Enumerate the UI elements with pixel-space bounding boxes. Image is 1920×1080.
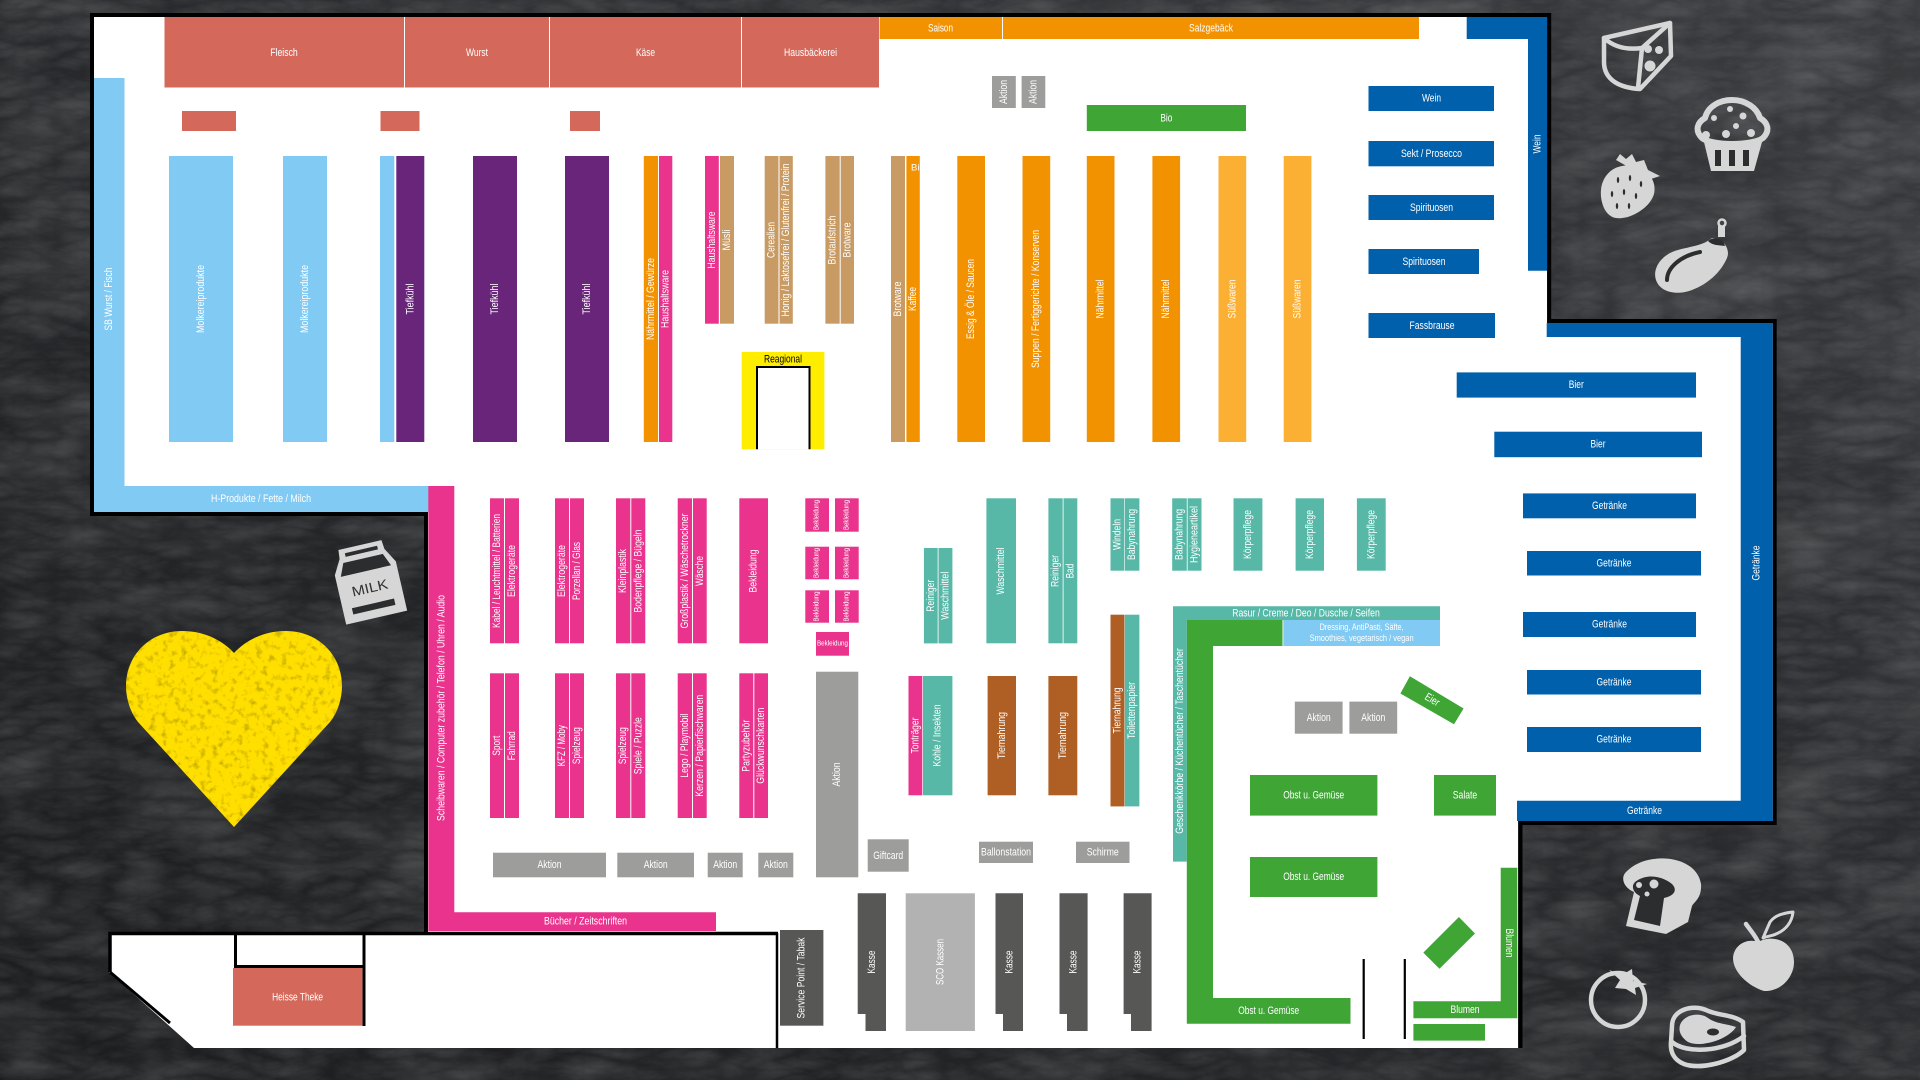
wall shelf: SB Wurst / H-Produkte — [94, 78, 428, 512]
rack: Bekleidung 4: Bekleidung — [843, 548, 850, 578]
aisle: Süßwaren 1: Süßwaren — [1226, 280, 1238, 318]
promo: Ballonstation: Ballonstation — [981, 846, 1031, 858]
wall shelf: SB Wurst / H-Produkte: SB Wurst / Fisch — [103, 268, 115, 330]
promo: Giftcard — [868, 839, 909, 872]
wall shelf: Blumen — [1413, 868, 1517, 1018]
drinks: Getränke 3: Getränke — [1592, 618, 1627, 630]
checkout: SCO Kassen: SCO Kassen — [934, 939, 946, 985]
drinks: Fassbrause: Fassbrause — [1410, 320, 1454, 332]
aisle: Nährmittel 2 — [1152, 156, 1180, 442]
rack: Bekleidung 6: Bekleidung — [843, 591, 850, 622]
aisle: light blue sliver — [380, 156, 394, 442]
display: Obst u. Gemüse 1 — [1250, 775, 1377, 816]
shelf: Bekleidung: Bekleidung — [748, 550, 760, 592]
promo: Ballonstation — [979, 842, 1033, 863]
drinks: Sekt / Prosecco — [1368, 141, 1494, 166]
shelf: Bio: Bio — [1160, 112, 1172, 124]
promo: Schirme: Schirme — [1087, 846, 1119, 858]
shelf: green block below Blumen — [1413, 1024, 1485, 1041]
drinks: Bier 1: Bier — [1569, 379, 1584, 391]
aisle: Molkereiprodukte 1: Molkereiprodukte — [195, 265, 207, 333]
shelf: Reiniger — [924, 548, 938, 643]
shelf: Körperpflege 3 — [1357, 498, 1386, 571]
promo: Aktion tall — [816, 672, 858, 877]
shelf: Honig / Laktosefrei: Honig / Laktosefrei / Glutenfrei / Protein — [780, 164, 792, 316]
shelf: Toilettenpapier — [1125, 615, 1139, 806]
checkout: Kasse 2: Kasse — [1003, 950, 1015, 974]
drinks: Spirituosen 2 — [1368, 249, 1479, 274]
display: Salate: Salate — [1453, 790, 1477, 802]
shelf: Haushaltsware — [705, 156, 719, 324]
shelf: Dressing — [1283, 620, 1440, 646]
promo: Aktion row 2: Aktion — [644, 859, 668, 871]
wall shelf: Wein — [1467, 17, 1547, 271]
shelf: Spielzeug 1 — [570, 673, 584, 818]
promo: Giftcard: Giftcard — [873, 850, 903, 862]
wall shelf: Blumen: Blumen — [1503, 928, 1515, 958]
shelf: Elektrogeräte 2 — [555, 498, 569, 643]
wall shelf: Obst u. Gemüse: Obst u. Gemüse — [1238, 1005, 1299, 1017]
shelf: Körperpflege 1: Körperpflege — [1242, 510, 1254, 559]
Regional display — [742, 352, 824, 449]
wall shelf: Getränke — [1517, 323, 1773, 821]
shelf: Spielzeug 2 — [616, 673, 630, 818]
shelf: Sport: Sport — [491, 736, 503, 756]
shelf: Wäsche — [693, 498, 707, 643]
shelf: Spielzeug 1: Spielzeug — [571, 727, 583, 764]
promo: Aktion produce 2 — [1349, 702, 1397, 734]
shelf: Porzellan / Glas: Porzellan / Glas — [571, 542, 583, 600]
counter: Service Point / Tabak: Service Point / Tabak — [796, 937, 808, 1018]
strip: Salzgebäck: Salzgebäck — [1189, 22, 1233, 34]
shelf: Wäsche: Wäsche — [694, 556, 706, 586]
shelf: Reiniger 2 — [1048, 498, 1063, 643]
shelf: Haushaltsware: Haushaltsware — [706, 212, 718, 268]
small counter 2 — [380, 111, 420, 131]
aisle: Suppen — [1022, 156, 1050, 442]
shelf: Kabel / Leuchtmittel — [490, 498, 504, 643]
shelf: Körperpflege 3: Körperpflege — [1365, 510, 1377, 559]
drinks: Wein: Wein — [1422, 92, 1441, 104]
drinks: Getränke 3 — [1523, 612, 1696, 637]
shelf: Reiniger 2: Reiniger — [1050, 555, 1062, 587]
shelf: Elektrogeräte 1: Elektrogeräte — [506, 545, 518, 597]
strip: Saison: Saison — [928, 22, 953, 34]
wall shelf: Rasur and Geschenkkörbe: Rasur / Creme / Deo / Dusche / Seifen — [1232, 608, 1380, 620]
drinks: Getränke 5: Getränke — [1596, 734, 1632, 746]
drinks: Bier 2: Bier — [1590, 438, 1606, 450]
rack: Bekleidung 1: Bekleidung — [814, 500, 821, 530]
counter: Hausbäckerei: Hausbäckerei — [784, 47, 837, 59]
checkout: Kasse 3: Kasse — [1068, 950, 1080, 974]
shelf: Brotaufstrich: Brotaufstrich — [827, 216, 839, 264]
shelf: Sport — [490, 673, 504, 818]
rack: Bekleidung 7 — [816, 632, 849, 656]
wall shelf: Rasur and Geschenkkörbe — [1173, 606, 1440, 862]
aisle: Kaffee: Bio — [911, 162, 925, 174]
aisle: Tiefkühl 3 — [565, 156, 609, 442]
display: Obst u. Gemüse 2 — [1250, 857, 1377, 897]
checkout: Kasse 1 — [858, 893, 886, 1031]
aisle: Tiefkühl 1: Tiefkühl — [404, 284, 416, 314]
shelf: Großplastik — [678, 498, 692, 643]
display: Obst u. Gemüse 1: Obst u. Gemüse — [1283, 790, 1344, 802]
shelf: Cerealien: Cerealien — [766, 222, 778, 258]
shelf: Elektrogeräte 2: Elektrogeräte — [556, 545, 568, 597]
aisle: Molkereiprodukte 2: Molkereiprodukte — [299, 265, 311, 333]
aisle: Essig & Öle: Essig & Öle / Saucen — [965, 259, 977, 339]
shelf: Tiernahrung 2 — [1048, 676, 1077, 795]
shelf: Kerzen: Kerzen / Papierfischwaren — [694, 695, 706, 797]
shelf: Glückwunschkarten — [754, 673, 768, 818]
shelf: Babynahrung 2: Babynahrung — [1174, 509, 1186, 560]
shelf: Kohle / Insekten — [923, 676, 952, 795]
promo: Aktion 1 — [992, 76, 1016, 108]
shelf: Waschmittel — [986, 498, 1016, 643]
drinks: Getränke 1: Getränke — [1592, 500, 1627, 512]
display: angled green table — [1423, 917, 1475, 969]
rack: Bekleidung 7: Bekleidung — [817, 640, 848, 648]
shelf: KFZ / Moby: KFZ / Moby — [556, 725, 568, 766]
aisle: Haushaltsware — [659, 156, 672, 442]
wall shelf: Blumen: Blumen — [1450, 1004, 1480, 1016]
shelf: Babynahrung 1 — [1125, 498, 1139, 571]
icon: strawberry — [1601, 154, 1660, 218]
shelf: Müsli: Müsli — [721, 230, 733, 250]
shelf: Windeln — [1110, 498, 1124, 571]
promo: Aktion row 1 — [493, 853, 606, 877]
shelf: Müsli — [720, 156, 734, 324]
wall shelf: Schreibwaren and Bücher: Bücher / Zeitschriften — [544, 916, 627, 928]
shelf: Kohle / Insekten: Kohle / Insekten — [932, 704, 944, 766]
shelf: Kleinplastik — [616, 498, 630, 643]
shelf: Fahrrad: Fahrrad — [506, 731, 518, 760]
wall shelf: Obst u. Gemüse — [1187, 620, 1350, 1024]
shelf: Fahrrad — [505, 673, 519, 818]
icon: milk carton — [329, 538, 407, 625]
shelf: Partyzubehör — [739, 673, 753, 818]
counter: Fleisch: Fleisch — [270, 47, 298, 59]
aisle: Brotware: Brotware — [892, 282, 904, 316]
promo: Aktion produce 1 — [1295, 702, 1343, 734]
promo: Aktion row 1: Aktion — [538, 859, 562, 871]
rack: Bekleidung 4 — [835, 547, 859, 579]
Regional display: Reagional — [764, 354, 802, 366]
rack: Bekleidung 6 — [835, 590, 859, 623]
checkout: Kasse 1: Kasse — [866, 950, 878, 974]
shelf: Bad: Bad — [1064, 564, 1076, 578]
shelf: Waschmittel: Waschmittel — [995, 548, 1007, 594]
icon: cheese — [1604, 23, 1671, 89]
drinks: Spirituosen 1: Spirituosen — [1410, 202, 1453, 214]
shelf: Bodenpflege / Bügeln — [631, 498, 645, 643]
wall shelf: Rasur and Geschenkkörbe: Geschenkkörbe / Küchentücher / Taschentücher — [1174, 648, 1186, 834]
shelf: Tiernahrung 3: Tiernahrung — [1112, 688, 1124, 734]
shelf: Hygieneartikel: Hygieneartikel — [1188, 506, 1200, 563]
shelf: Spielzeug 2: Spielzeug — [617, 727, 629, 764]
entrance gate lines — [1363, 959, 1406, 1039]
drinks: Getränke 2 — [1527, 551, 1701, 576]
aisle: Nährmittel / Gewürze: Nährmittel / Gewürze — [645, 258, 657, 340]
shelf: Toilettenpapier: Toilettenpapier — [1126, 682, 1138, 739]
shelf: Tiernahrung 3 — [1110, 615, 1124, 806]
display: Eier — [1400, 676, 1464, 724]
strip: Salzgebäck — [1003, 17, 1419, 39]
drinks: Getränke 4: Getränke — [1596, 676, 1632, 688]
aisle: Haushaltsware: Haushaltsware — [660, 270, 672, 328]
drinks: Spirituosen 2: Spirituosen — [1402, 256, 1446, 268]
aisle: Kaffee — [906, 156, 920, 442]
drinks: Bier 2 — [1494, 432, 1702, 457]
counter: Heisse Theke: Heisse Theke — [272, 992, 323, 1004]
shelf: Brotaufstrich — [825, 156, 840, 324]
shelf: Lego / Playmobil — [678, 673, 692, 818]
promo: Aktion produce 2: Aktion — [1361, 712, 1385, 724]
aisle: Nährmittel / Gewürze — [644, 156, 658, 442]
aisle: Süßwaren 1 — [1218, 156, 1246, 442]
promo: Aktion 1: Aktion — [998, 80, 1010, 104]
shelf: Spiele / Puzzle: Spiele / Puzzle — [632, 717, 644, 774]
shelf: Tiernahrung 1 — [988, 676, 1016, 795]
drinks: Fassbrause — [1368, 313, 1495, 338]
promo: Aktion row 2 — [617, 853, 694, 877]
display: Salate — [1434, 775, 1496, 816]
checkout: SCO Kassen — [906, 893, 975, 1031]
wall shelf: Schreibwaren and Bücher — [428, 486, 716, 931]
shelf: Waschmittel small — [938, 548, 952, 643]
shelf: Großplastik: Großplastik / Wäschetrockner — [679, 513, 691, 629]
shelf: Porzellan / Glas — [570, 498, 584, 643]
promo: Aktion row 3: Aktion — [713, 859, 737, 871]
aisle: Kaffee: Kaffee — [907, 287, 919, 311]
aisle: Tiefkühl 1 — [396, 156, 424, 442]
aisle: Suppen: Suppen / Fertiggerichte / Konserven — [1030, 230, 1042, 368]
shelf: Glückwunschkarten: Glückwunschkarten — [755, 708, 767, 784]
promo: Aktion produce 1: Aktion — [1307, 712, 1331, 724]
aisle: Brotware — [891, 156, 905, 442]
rack: Bekleidung 5: Bekleidung — [814, 591, 821, 622]
rack: Bekleidung 5 — [805, 590, 829, 623]
shelf: Cerealien — [765, 156, 778, 324]
aisle: Nährmittel 1 — [1087, 156, 1114, 442]
shelf: Bodenpflege / Bügeln: Bodenpflege / Bügeln — [632, 530, 644, 612]
icon: apple — [1733, 912, 1794, 991]
rack: Bekleidung 3: Bekleidung — [814, 548, 821, 578]
promo: Aktion row 4 — [758, 853, 793, 877]
counter: Fleisch — [164, 17, 404, 88]
icon: milk carton: MILK — [350, 576, 390, 600]
shelf: Bio — [1087, 105, 1246, 131]
shelf: Dressing: Dressing, AntiPasti, Säfte, — [1320, 622, 1404, 633]
shelf: Waschmittel small: Waschmittel — [940, 572, 952, 620]
counter: Käse — [550, 17, 741, 88]
shelf: Reiniger: Reiniger — [925, 579, 937, 612]
shelf: Elektrogeräte 1 — [505, 498, 519, 643]
checkout: Kasse 4 — [1124, 893, 1152, 1031]
shelf: Körperpflege 1 — [1234, 498, 1262, 571]
rack: Bekleidung 1 — [805, 498, 829, 532]
yellow heart — [126, 631, 342, 827]
wall shelf: Getränke: Getränke — [1627, 805, 1662, 817]
shelf: Bad — [1064, 498, 1077, 643]
shelf: Kleinplastik: Kleinplastik — [617, 549, 629, 593]
small counter 1 — [182, 111, 236, 131]
shelf: Tiernahrung 1: Tiernahrung — [996, 712, 1008, 759]
aisle: Nährmittel 2: Nährmittel — [1160, 280, 1172, 318]
shelf: Kabel / Leuchtmittel: Kabel / Leuchtmittel / Batterien — [491, 514, 503, 628]
shelf: Brotware — [841, 156, 854, 324]
promo: Aktion 2 — [1022, 76, 1045, 108]
shelf: Körperpflege 2: Körperpflege — [1304, 510, 1316, 559]
shelf: Babynahrung 1: Babynahrung — [1126, 509, 1138, 560]
shelf: Körperpflege 2 — [1296, 498, 1324, 571]
shelf: Partyzubehör: Partyzubehör — [740, 719, 752, 772]
aisle: Tiefkühl 2: Tiefkühl — [489, 284, 501, 314]
shelf: Bekleidung — [739, 498, 768, 643]
drinks: Wein — [1368, 86, 1494, 111]
strip: Saison — [880, 17, 1002, 39]
aisle: Nährmittel 1: Nährmittel — [1095, 280, 1107, 318]
drinks: Sekt / Prosecco: Sekt / Prosecco — [1401, 148, 1462, 160]
wall shelf: Wein: Wein — [1532, 134, 1544, 154]
rack: Bekleidung 2 — [835, 498, 859, 532]
shelf: Tiernahrung 2: Tiernahrung — [1057, 712, 1069, 759]
display: Obst u. Gemüse 2: Obst u. Gemüse — [1283, 871, 1344, 883]
checkout: Kasse 3 — [1060, 893, 1088, 1031]
icon: eggplant — [1655, 220, 1728, 293]
counter: Heisse Theke — [233, 968, 362, 1026]
promo: Aktion row 4: Aktion — [764, 859, 788, 871]
shelf: Brotware: Brotware — [841, 222, 853, 258]
promo: Schirme — [1076, 842, 1130, 863]
promo: Aktion 2: Aktion — [1027, 80, 1039, 104]
aisle: Tiefkühl 2 — [473, 156, 517, 442]
icon: steak — [1671, 1008, 1744, 1066]
shelf: Spiele / Puzzle — [631, 673, 645, 818]
drinks: Spirituosen 1 — [1368, 195, 1494, 220]
shelf: Windeln: Windeln — [1112, 519, 1124, 550]
shelf: Tonträger — [908, 676, 922, 795]
rack: Bekleidung 2: Bekleidung — [843, 500, 850, 530]
aisle: Molkereiprodukte 1 — [169, 156, 233, 442]
rack: Bekleidung 3 — [805, 547, 829, 579]
wall shelf: Schreibwaren and Bücher: Scheibwaren / Computer zubehör / Telefon / Uhren / Audio — [435, 595, 447, 821]
aisle: Molkereiprodukte 2 — [283, 156, 327, 442]
shelf: KFZ / Moby — [555, 673, 569, 818]
wall shelf: Getränke: Getränke — [1751, 546, 1763, 580]
icon: tomato — [1591, 969, 1647, 1027]
counter: Wurst: Wurst — [466, 47, 488, 59]
promo: Aktion tall: Aktion — [831, 762, 843, 786]
checkout: Kasse 2 — [996, 893, 1023, 1031]
promo: Aktion row 3 — [708, 853, 743, 877]
aisle: Süßwaren 2: Süßwaren — [1292, 280, 1304, 318]
aisle: Süßwaren 2 — [1284, 156, 1311, 442]
counter: Hausbäckerei — [742, 17, 879, 88]
checkout: Kasse 4: Kasse — [1132, 950, 1144, 974]
counter: Käse: Käse — [636, 47, 655, 59]
drinks: Getränke 5 — [1527, 727, 1701, 752]
drinks: Getränke 1 — [1523, 493, 1696, 518]
shelf: Babynahrung 2 — [1172, 498, 1187, 571]
shelf: Tonträger: Tonträger — [909, 717, 921, 754]
aisle: Essig & Öle — [957, 156, 985, 442]
drinks: Getränke 4 — [1527, 670, 1701, 694]
aisle: Tiefkühl 3: Tiefkühl — [581, 284, 593, 314]
wall shelf: SB Wurst / H-Produkte: H-Produkte / Fette / Milch — [211, 493, 311, 505]
counter: Service Point / Tabak — [780, 930, 823, 1026]
shelf: Lego / Playmobil: Lego / Playmobil — [679, 714, 691, 778]
counter: Wurst — [405, 17, 549, 88]
small counter 3 — [570, 111, 600, 131]
display: Eier: Eier — [1422, 691, 1442, 709]
drinks: Getränke 2: Getränke — [1596, 558, 1632, 570]
icon: bread — [1623, 858, 1701, 934]
icon: muffin — [1698, 100, 1767, 171]
drinks: Bier 1 — [1457, 372, 1696, 398]
shelf: Dressing: Smoothies, vegetarisch / vegan — [1310, 633, 1414, 644]
